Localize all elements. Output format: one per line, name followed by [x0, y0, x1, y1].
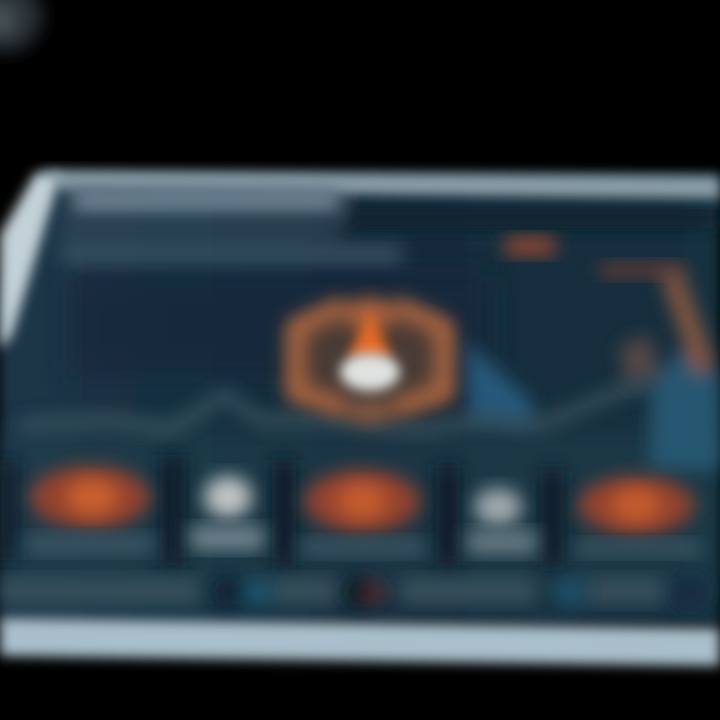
callout: right orange text: [600, 262, 685, 278]
icon: side lobes: [296, 299, 444, 423]
icon: central orange hexagon: [292, 298, 448, 423]
card 3: orange metric: [300, 470, 425, 556]
column separators: [0, 455, 564, 565]
icon: flame: [348, 310, 392, 358]
frame: bottom edge: [0, 618, 720, 666]
chart: trend line: [20, 380, 650, 430]
panel: lower shading: [0, 430, 720, 610]
card 1: orange metric: [25, 466, 155, 554]
corner globe: [0, 0, 42, 52]
bottom row: legend bar: [0, 578, 665, 604]
card 4: white metric: [467, 488, 537, 554]
icon: white core: [340, 353, 400, 391]
panel: dashboard background: [0, 175, 720, 625]
frame: left edge: [0, 172, 60, 350]
icon: hexagon fill: [292, 298, 448, 420]
card 2: white metric: [190, 476, 264, 550]
card 5: orange metric: [575, 476, 700, 556]
panel: dark centre region: [70, 275, 490, 375]
chart: area peaks on right: [465, 272, 720, 470]
frame: top edge: [42, 170, 720, 200]
callout: orange label: [505, 236, 555, 256]
bottom row: legend icons: [213, 574, 708, 610]
heading: [72, 186, 715, 228]
subheading text block: [60, 224, 402, 264]
